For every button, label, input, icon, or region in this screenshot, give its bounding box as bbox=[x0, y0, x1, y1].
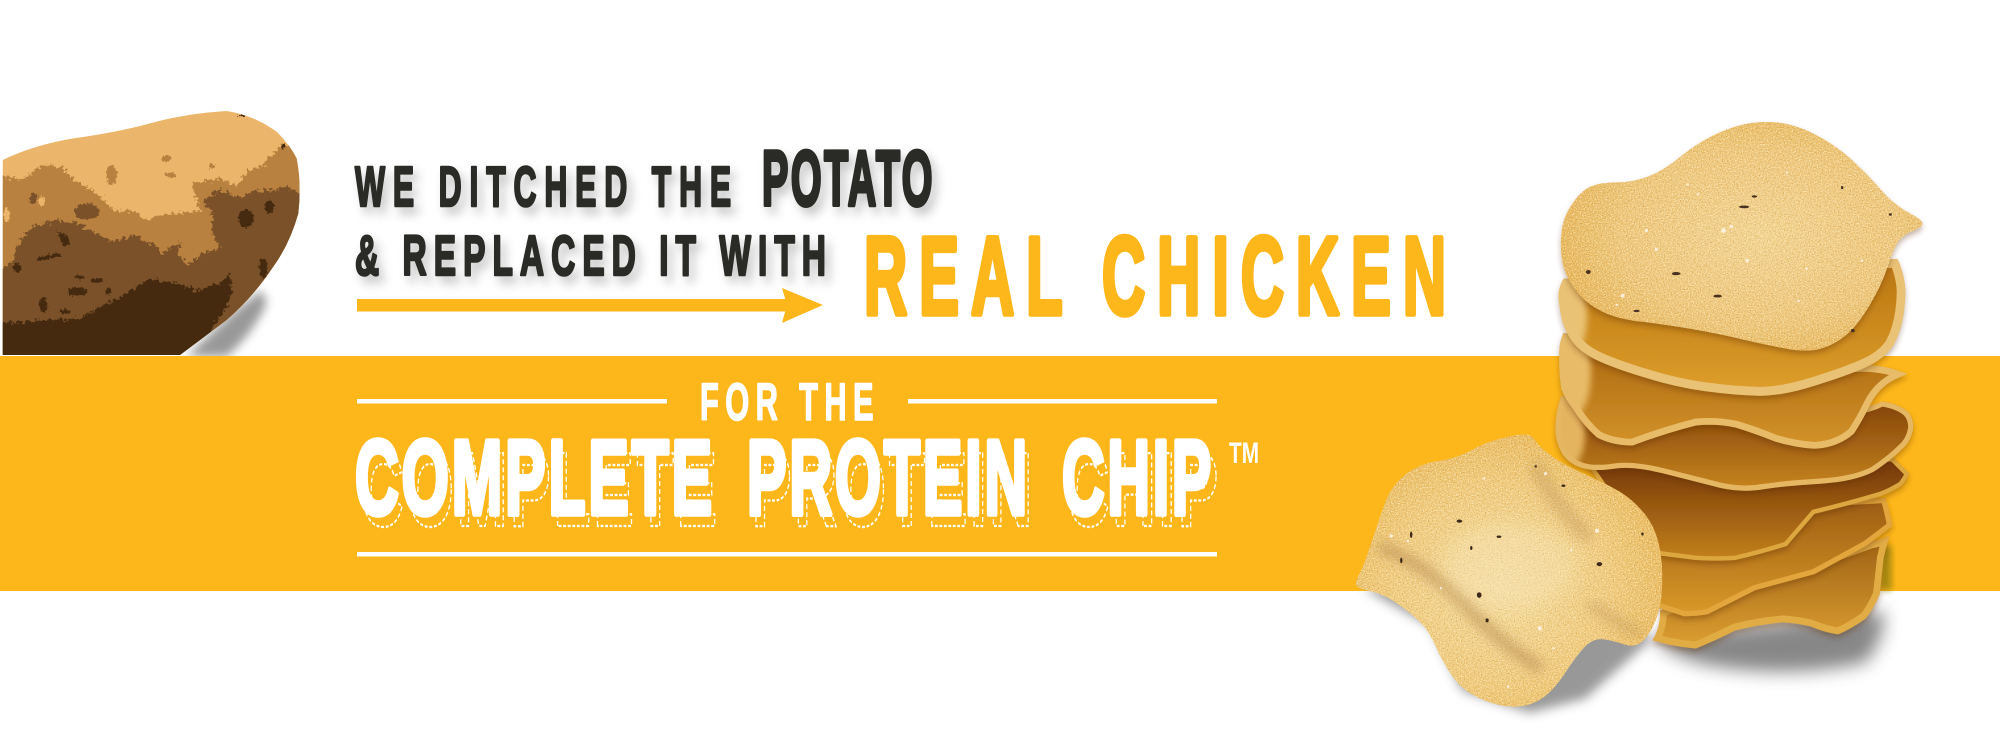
solid white lettering: COMPLETE bbox=[355, 419, 715, 537]
chip shadow bbox=[1364, 546, 1892, 713]
loose chip in front bbox=[1356, 434, 1662, 707]
front chip highlight bbox=[1443, 522, 1577, 610]
arrow bbox=[357, 288, 823, 323]
headline: we ditched the potato bbox=[355, 134, 935, 288]
chip pile bbox=[1356, 122, 1923, 713]
chip 2 bbox=[1555, 259, 1905, 396]
text: for the: FOR THE bbox=[700, 373, 880, 432]
text: we ditched the: WE DITCHED THE bbox=[355, 155, 739, 219]
chip 3 bbox=[1552, 329, 1907, 449]
rule: right of for the bbox=[908, 399, 1217, 404]
rule: left of for the bbox=[357, 399, 667, 404]
text: potato: POTATO bbox=[762, 134, 935, 222]
chip 6 bbox=[1648, 498, 1892, 616]
rule: bottom bbox=[357, 552, 1217, 556]
chip 1 specks bbox=[1586, 186, 1892, 332]
solid white lettering: CHIP bbox=[1062, 419, 1214, 537]
yellow band bbox=[0, 356, 2000, 591]
headline: real chicken: REAL CHICKEN bbox=[864, 215, 1458, 338]
dashed offset outline: PROTEIN bbox=[752, 431, 1035, 549]
icon: potato bbox=[2, 111, 300, 355]
trademark: TM bbox=[1229, 437, 1259, 470]
front chip specks bbox=[1400, 465, 1644, 622]
chip 4 bbox=[1546, 395, 1913, 491]
dashed offset outline: COMPLETE bbox=[360, 431, 720, 549]
chip 7: bottom of stack bbox=[1652, 536, 1890, 648]
dashed offset outline: CHIP bbox=[1066, 431, 1221, 549]
chip 5 bbox=[1585, 454, 1909, 561]
front chip grill marks bbox=[1383, 470, 1637, 667]
chip 1: top of stack bbox=[1561, 122, 1923, 351]
headline: complete protein chip bbox=[355, 419, 1259, 549]
text: and replaced it with: & REPLACED IT WITH bbox=[355, 224, 833, 288]
solid white lettering: PROTEIN bbox=[747, 419, 1030, 537]
potato shadow bbox=[187, 290, 267, 357]
